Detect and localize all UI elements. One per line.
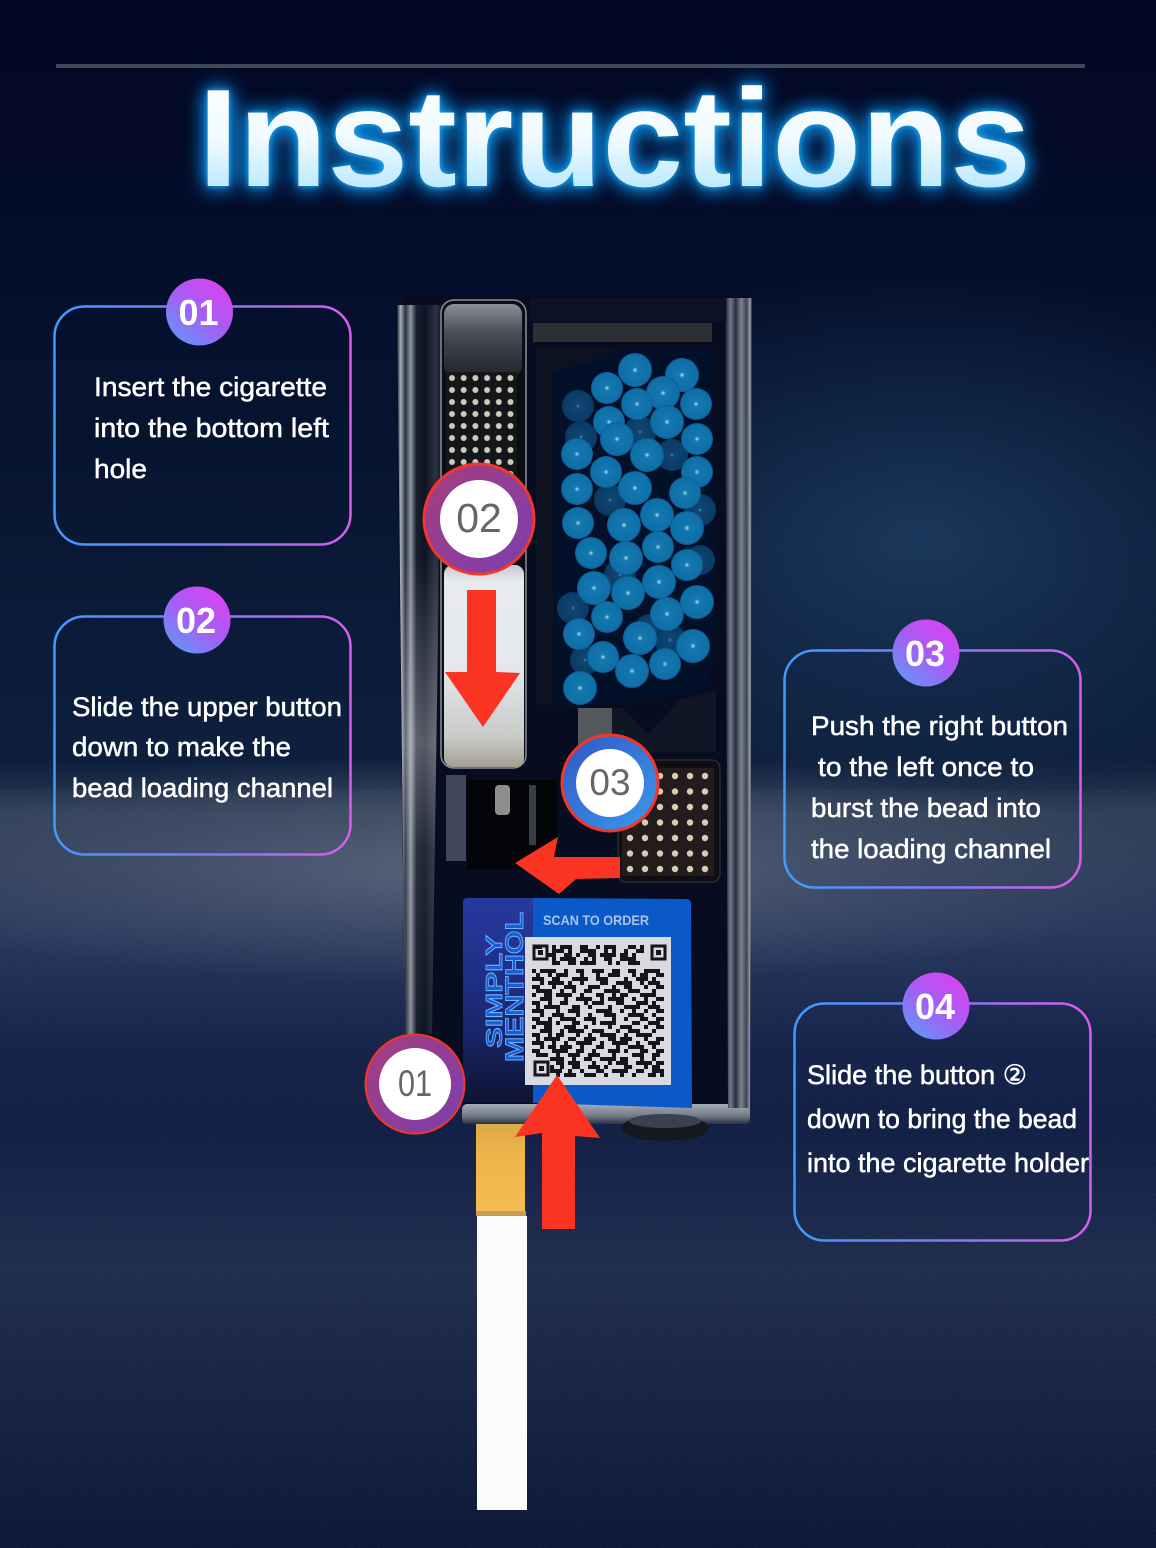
step 02 text: bead loading channel xyxy=(72,773,333,803)
top slot xyxy=(533,323,712,342)
badge 03 xyxy=(892,620,960,686)
marker 01: 01 xyxy=(398,1063,432,1104)
slider dot grid xyxy=(446,372,517,482)
badge 02: 02 xyxy=(176,600,216,641)
slider silver lower xyxy=(444,565,524,767)
step 04 text: down to bring the bead xyxy=(807,1104,1077,1134)
step 01 text xyxy=(94,372,330,484)
QR code xyxy=(525,937,671,1085)
brand name xyxy=(481,912,529,1062)
clear left edge xyxy=(397,305,443,1034)
slider rail xyxy=(441,300,526,768)
blue beads xyxy=(557,353,716,705)
device xyxy=(396,296,752,1141)
QR finder squares xyxy=(534,946,665,1075)
marker 03 xyxy=(562,735,658,831)
top divider rule xyxy=(56,64,1085,68)
badge 01: 01 xyxy=(178,292,219,333)
panel: step 03 xyxy=(784,620,1080,888)
lower left smear xyxy=(446,775,466,861)
lower black channel xyxy=(467,780,557,870)
scan to order: SCAN TO ORDER xyxy=(543,912,649,928)
step 03 text: burst the bead into xyxy=(811,793,1041,823)
step 02 text: Slide the upper button xyxy=(72,692,342,722)
lower right button xyxy=(618,760,720,882)
brand name: MENTHOL xyxy=(501,912,529,1062)
bead compartment xyxy=(536,348,716,706)
slider button xyxy=(441,300,526,768)
arrow: insert up xyxy=(515,1075,600,1229)
panel outline 02 xyxy=(54,616,350,854)
clear right edge xyxy=(725,298,752,1108)
arrow: slide down xyxy=(445,590,520,727)
brand name: SIMPLY xyxy=(481,935,507,1048)
title: Instructions xyxy=(198,61,1031,216)
step 03 text: Push the right button xyxy=(811,711,1068,741)
panel: step 01 xyxy=(54,278,350,544)
right chamber plate xyxy=(612,690,716,752)
marker 03: 03 xyxy=(589,762,631,803)
top rail xyxy=(530,298,726,322)
panel: step 02 xyxy=(54,586,350,854)
step 02 text: down to make the xyxy=(72,732,291,762)
arrow: push left xyxy=(515,837,620,894)
marker 02 xyxy=(424,464,534,574)
panel outline 01 xyxy=(54,306,350,544)
marker 01 xyxy=(366,1034,464,1134)
step 04 text xyxy=(807,1060,1089,1178)
panel outline 03 xyxy=(784,650,1080,888)
cigarette xyxy=(476,1120,527,1510)
silver patch behind chamber xyxy=(578,708,614,758)
badge 04 xyxy=(902,972,970,1040)
panel outline 04 xyxy=(794,1004,1090,1240)
QR finder centres xyxy=(538,950,661,1071)
step 03 text xyxy=(811,711,1068,864)
badge 04: 04 xyxy=(915,986,955,1027)
label right panel xyxy=(533,898,692,1108)
step 03 text: to the left once to xyxy=(818,752,1034,782)
step 02 text xyxy=(72,692,342,803)
marker 02: 02 xyxy=(456,495,502,541)
step 01 text: hole xyxy=(94,454,147,484)
step 01 text: into the bottom left xyxy=(94,413,330,443)
badge 03: 03 xyxy=(905,633,945,674)
QR label card xyxy=(463,898,692,1108)
step 01 text: Insert the cigarette xyxy=(94,372,327,402)
step 04 text: into the cigarette holder xyxy=(807,1148,1089,1178)
label left panel xyxy=(463,898,535,1103)
badge 02 xyxy=(164,586,230,654)
step 04 text: Slide the button ② xyxy=(807,1060,1027,1090)
slider top grip xyxy=(444,304,522,376)
panel: step 04 xyxy=(794,972,1090,1240)
device body xyxy=(396,296,752,1122)
step 03 text: the loading channel xyxy=(811,834,1051,864)
badge 01 xyxy=(166,278,233,346)
device bottom cap xyxy=(462,1104,750,1141)
